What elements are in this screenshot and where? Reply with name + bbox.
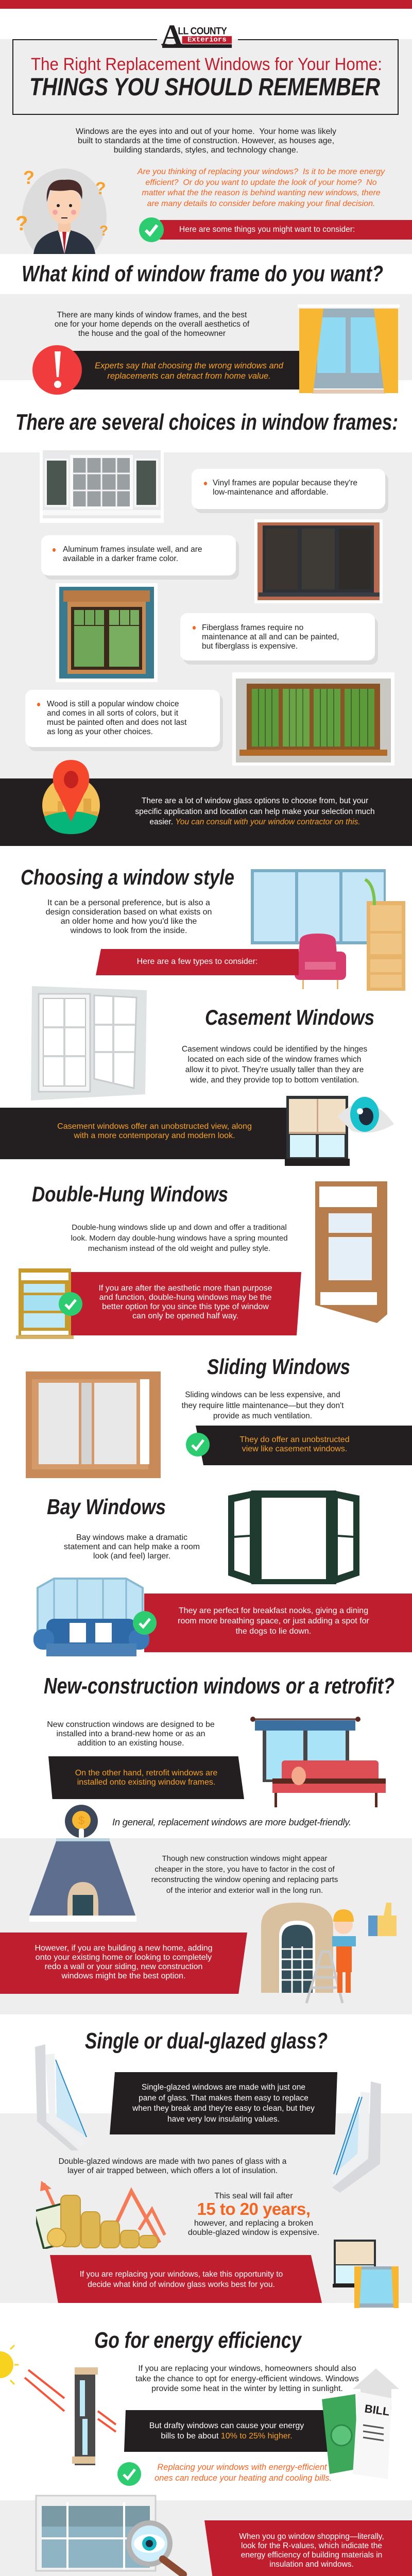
though text: of the interior and exterior wall in the long run. <box>166 1886 323 1895</box>
red bar: decide glass: If you are replacing your windows, take this opportunity to <box>80 2270 283 2279</box>
photo: double-hung window <box>315 1181 387 1323</box>
energy text <box>118 2364 376 2394</box>
icon: thinking man: ? <box>15 212 28 235</box>
double-hung text: look. Modern day double-hung windows have a spring mounted <box>71 1233 288 1243</box>
black bar: sliding view: view like casement windows. <box>242 1445 347 1453</box>
photo: bay window <box>228 1490 359 1584</box>
icon: coin: $ <box>78 1814 84 1827</box>
icon: window with red sofa <box>250 1717 386 1807</box>
card: wood: and comes in all sorts of colors, but it <box>47 709 178 718</box>
icon: thinking man: ? <box>95 179 106 198</box>
icon: coin <box>65 1805 98 1838</box>
red bar: new home: However, if you are building a new home, adding <box>35 1944 213 1953</box>
icon: thinking man: ? <box>99 223 108 239</box>
double-hung text: Double-hung windows slide up and down and offer a traditional <box>72 1223 287 1232</box>
red bar: new home: windows might be the best option. <box>61 1972 186 1980</box>
icon: map pin <box>42 760 100 834</box>
energy text: take the chance to opt for energy-efficient windows. Windows <box>135 2374 359 2383</box>
icon: single glazed frame <box>35 2044 94 2150</box>
card: vinyl: low-maintenance and affordable. <box>213 488 329 497</box>
logo: top: LL COUNTY <box>178 26 227 37</box>
energy text: provide some heat in the winter by letting in sunlight. <box>151 2384 343 2393</box>
black box: retrofit: installed onto existing window frames. <box>77 1778 215 1787</box>
though text: reconstructing the window opening and replacing parts <box>151 1875 338 1884</box>
red bar: double-hung aesthetic <box>70 1272 301 1335</box>
logo: top: A <box>161 19 183 52</box>
red bar: new home <box>0 1933 247 1994</box>
choosing text: design consideration based on what exists on <box>46 908 212 917</box>
choosing text: an older home and how you'd like the <box>61 917 197 926</box>
seal stat: double-glazed window is expensive. <box>188 2228 319 2237</box>
though text: Though new construction windows might appear <box>162 1854 328 1863</box>
orange question text <box>137 167 385 208</box>
red bar: double-hung aesthetic: If you are after the aesthetic more than purpose <box>98 1284 272 1293</box>
icon: bill and money <box>322 2368 404 2479</box>
red bar: R-values: energy efficiency of building materials in <box>241 2551 382 2560</box>
red bar: bay uses: room more breathing space, or just adding a spot for <box>178 1617 369 1625</box>
heading: bay: Bay Windows <box>47 1495 166 1519</box>
photo: vinyl window <box>40 450 164 523</box>
though text <box>136 1854 353 1896</box>
red bar: decide glass: decide what kind of window glass works best for you. <box>88 2280 275 2289</box>
red bar: bay uses: They are perfect for breakfast nooks, giving a dining <box>179 1606 368 1615</box>
photo: casement window <box>31 986 147 1100</box>
seal stat: This seal will fail after <box>214 2192 293 2200</box>
icon: thinking man: ? <box>23 167 35 188</box>
black band text: glass options: easier. You can consult with your window contractor on this. <box>149 818 360 826</box>
budget italic text: In general, replacement windows are more budget-friendly. <box>112 1817 351 1827</box>
black box: single glazed: Single-glazed windows are made with just one <box>142 2083 305 2092</box>
red bar: decide glass <box>50 2255 322 2303</box>
icon: double-hung window with check <box>16 1268 82 1339</box>
new construction text: New construction windows are designed to be <box>47 1720 215 1729</box>
callout: experts warning: replacements can detract from home value. <box>107 371 271 381</box>
orange question text: efficient? Or do you want to update the look of your home? No <box>145 178 377 187</box>
title <box>29 55 382 101</box>
icon: worker at arched window <box>260 1900 404 2004</box>
casement text <box>182 1045 367 1084</box>
red bar: R-values <box>204 2520 412 2576</box>
red bar: double-hung aesthetic: better option for you since this type of window <box>102 1302 269 1311</box>
black bar: sliding view <box>186 1426 412 1465</box>
icon: roof with window <box>29 1838 136 1922</box>
bay text: look (and feel) larger. <box>93 1552 170 1561</box>
icon: curtained window <box>298 304 400 394</box>
icon: sun and window section <box>0 2334 118 2465</box>
sliding text <box>181 1391 344 1420</box>
title box <box>12 39 399 115</box>
black box: drafty <box>124 2410 333 2452</box>
orange question text: matter what the the reason is behind wanting new windows, there <box>142 189 381 197</box>
red bar: bay uses <box>144 1594 412 1652</box>
seal stat: however, and replacing a broken <box>194 2219 313 2228</box>
seal stat <box>185 2190 322 2239</box>
double glazed text: layer of air trapped between, which offers a lot of insulation. <box>67 2166 278 2175</box>
card: fiberglass: Fiberglass frames require no <box>202 623 303 632</box>
choosing text: windows to look from the inside. <box>71 926 187 935</box>
choosing text: It can be a personal preference, but is also a <box>47 899 210 907</box>
intro text: Windows are the eyes into and out of your home. Your home was likely <box>76 127 336 136</box>
black band text: glass options: There are a lot of window glass options to choose from, but your <box>142 796 368 805</box>
icon: money with arrows <box>36 2181 167 2249</box>
black box: single glazed: when they break and they're easy to clean, but they <box>132 2104 315 2113</box>
card: wood <box>25 690 220 747</box>
card: fiberglass: but fiberglass is expensive. <box>202 642 298 651</box>
black bar: casement view: Casement windows offer an unobstructed view, along <box>57 1122 252 1131</box>
black box: retrofit: On the other hand, retrofit windows are <box>75 1769 217 1777</box>
heading: choosing style: Choosing a window style <box>21 865 234 889</box>
heading: energy: Go for energy efficiency <box>94 2328 302 2353</box>
black box: drafty: bills to be about 10% to 25% higher. <box>161 2432 293 2441</box>
logo: top: Exteriors <box>187 36 227 44</box>
icon: room with window, chair, shelf <box>251 869 405 991</box>
photo: aluminum window <box>254 519 383 603</box>
orange question text: Are you thinking of replacing your windows? Is it to be more energy <box>138 167 385 176</box>
heading: casement: Casement Windows <box>205 1005 374 1029</box>
card: fiberglass <box>180 613 375 660</box>
black box: single glazed <box>110 2072 337 2134</box>
card: wood: Wood is still a popular window choice <box>47 700 179 708</box>
sliding text: provide as much ventilation. <box>213 1412 312 1420</box>
card: vinyl: Vinyl frames are popular because they're <box>213 479 357 487</box>
black box: retrofit <box>48 1756 244 1799</box>
choosing text <box>46 899 212 935</box>
black band text: glass options: specific application and location can help make your selection much <box>135 807 375 816</box>
icon: window with blinds and eye <box>285 1096 394 1166</box>
intro text: building standards, styles, and technology change. <box>114 146 298 155</box>
casement text: wide, and they provide top to bottom ventilation. <box>190 1076 359 1084</box>
bay text: Bay windows make a dramatic <box>76 1533 187 1542</box>
double-hung text <box>71 1223 288 1253</box>
card: vinyl <box>192 469 385 509</box>
frames intro text <box>55 311 249 338</box>
red bar: things to consider <box>139 217 412 242</box>
icon: double glazed frame <box>319 2081 381 2193</box>
bay text: statement and can help make a room <box>64 1543 200 1551</box>
logo: top <box>161 19 232 52</box>
double-hung text: mechanism instead of the old weight and pulley style. <box>88 1244 270 1253</box>
red bar: R-values: insulation and windows. <box>269 2560 354 2569</box>
heading: double-hung: Double-Hung Windows <box>32 1182 228 1206</box>
red bar: R-values: When you go window shopping—literally, <box>239 2532 384 2541</box>
card: aluminum <box>41 535 236 575</box>
callout: energy-efficient savings <box>117 2462 334 2486</box>
intro text <box>76 127 336 155</box>
card: fiberglass: maintenance at all and can be painted, <box>202 633 339 641</box>
black bar: casement view: with a more contemporary and modern look. <box>74 1131 235 1140</box>
icon: blinds window and curtain window <box>333 2240 400 2308</box>
callout: energy-efficient savings: ones can reduce your heating and cooling bills. <box>154 2473 332 2483</box>
card: aluminum: available in a darker frame color. <box>63 554 178 563</box>
black bar: sliding view: They do offer an unobstructed <box>239 1435 350 1444</box>
photo: wood casement window <box>232 672 394 766</box>
black box: single glazed: pane of glass. That makes them easy to replace <box>139 2094 308 2102</box>
frames intro text: one for your home depends on the overall aesthetics of <box>55 320 249 329</box>
callout: experts warning <box>32 345 299 395</box>
orange question text: are many details to consider before making your final decision. <box>147 199 375 208</box>
photo: sliding window <box>26 1371 161 1478</box>
double glazed text: Double-glazed windows are made with two panes of glass with a <box>59 2157 286 2166</box>
intro text: built to standards at the time of construction. However, as houses age, <box>78 137 334 145</box>
new construction text: installed into a brand-new home or as an <box>56 1730 205 1738</box>
red bar: double-hung aesthetic: can only be opened half way. <box>132 1312 238 1320</box>
red banner: types <box>96 949 299 975</box>
black band text: glass options <box>135 796 375 826</box>
red bar: R-values: look for the R-values, which indicate the <box>241 2541 382 2550</box>
callout: energy-efficient savings: Replacing your windows with energy-efficient <box>157 2463 327 2472</box>
red bar: things to consider: Here are some things you might want to consider: <box>179 225 355 234</box>
red banner: types: Here are a few types to consider: <box>137 957 258 966</box>
card: aluminum: Aluminum frames insulate well, and are <box>63 545 202 554</box>
icon: thinking man <box>15 167 108 254</box>
seal stat: 15 to 20 years, <box>197 2199 310 2218</box>
icon: bill and money: BILL <box>364 2402 390 2418</box>
card: wood: as long as your other choices. <box>47 727 153 736</box>
callout: experts warning: Experts say that choosing the wrong windows and <box>95 361 283 370</box>
casement text: allow it to pivot. They're usually taller than they are <box>185 1065 364 1074</box>
new construction text <box>47 1720 215 1748</box>
red bar: new home: redo a wall or your siding, new construction <box>45 1962 202 1971</box>
icon: bay window couch <box>33 1578 157 1656</box>
red bar: double-hung aesthetic: and function, double-hung windows may be the <box>99 1293 271 1302</box>
though text: cheaper in the store, you have to factor in the cost of <box>154 1865 335 1873</box>
black box: drafty: But drafty windows can cause your energy <box>149 2421 304 2430</box>
black box: single glazed: have very low insulating values. <box>167 2114 280 2124</box>
red bar: bay uses: the dogs to lie down. <box>236 1627 311 1636</box>
icon: window with magnifier <box>35 2495 190 2576</box>
photo: wood window blue wall <box>56 583 158 682</box>
new construction text: addition to an existing house. <box>77 1739 184 1748</box>
bay text <box>64 1533 200 1561</box>
sliding text: Sliding windows can be less expensive, and <box>185 1391 340 1399</box>
frames intro text: the house and the goal of the homeowner <box>78 329 226 338</box>
card: wood: must be painted often and does not last <box>47 718 186 727</box>
black bar: casement view <box>0 1108 288 1159</box>
casement text: located on each side of the window frames which <box>188 1055 361 1064</box>
heading: sliding: Sliding Windows <box>207 1354 350 1379</box>
heading: glazing: Single or dual-glazed glass? <box>85 2028 328 2054</box>
casement text: Casement windows could be identified by the hinges <box>182 1045 367 1054</box>
double glazed text <box>18 2157 327 2176</box>
frames intro text: There are many kinds of window frames, and the best <box>57 311 247 319</box>
title: The Right Replacement Windows for Your Home: <box>31 55 382 74</box>
energy text: If you are replacing your windows, homeowners should also <box>138 2364 356 2373</box>
sliding text: they require little maintenance—but they don't <box>182 1401 344 1410</box>
red bar: new home: onto your existing home or looking to completely <box>36 1953 212 1962</box>
